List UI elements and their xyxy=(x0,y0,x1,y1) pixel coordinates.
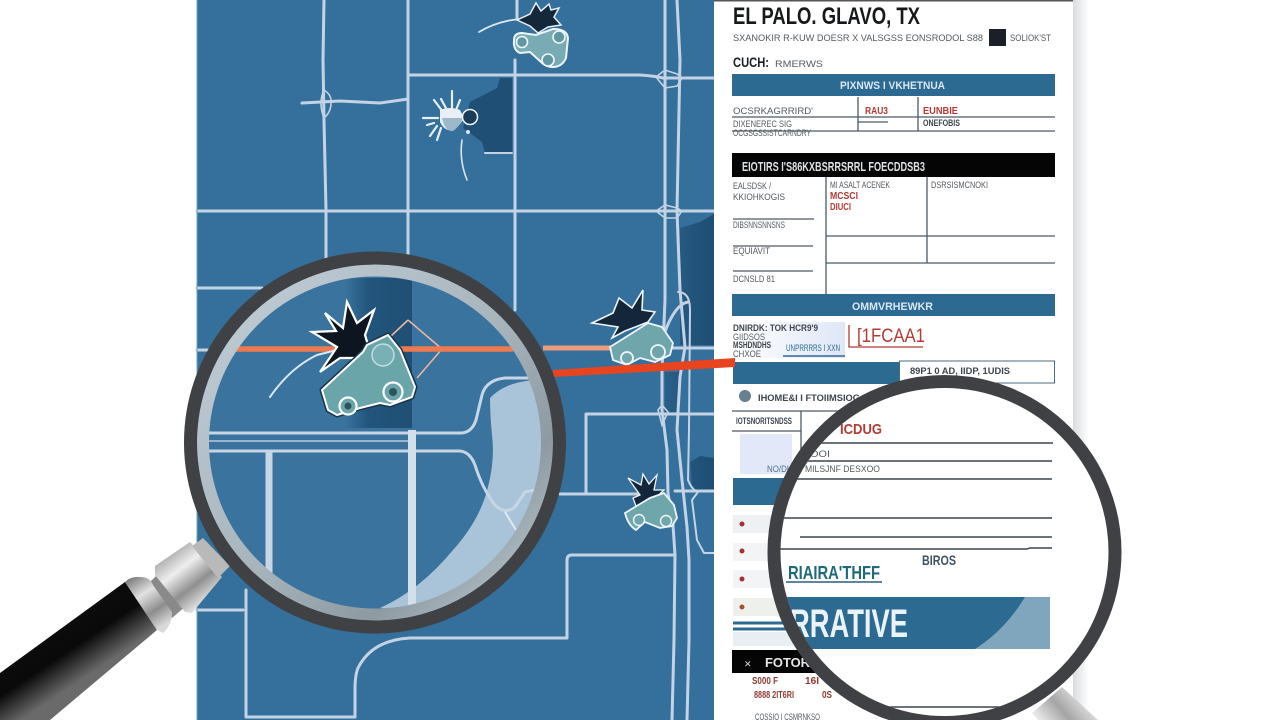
zoomed roads xyxy=(200,378,535,610)
dark waterfront patches xyxy=(665,214,714,490)
text block: overview xyxy=(732,322,845,359)
zoomed map content xyxy=(209,278,541,608)
section header: black footer band xyxy=(732,650,822,673)
icon: crash burst xyxy=(312,302,374,372)
case label xyxy=(733,54,823,70)
section header: black band: EIOTIRS I'S86KXBSRRSRRL FOECDDSB3 xyxy=(742,159,925,174)
list: red bullet rows xyxy=(733,515,793,646)
table: crash summary: DIXENEREC SIG xyxy=(733,119,792,129)
table: information rows: IOTSNORITSNDSS xyxy=(736,416,792,426)
lens inner edge xyxy=(778,386,1110,718)
zoomed field label: ICDUG xyxy=(840,421,882,438)
arrow: red connector from map to report xyxy=(553,358,735,377)
zoomed report content xyxy=(770,421,1053,707)
text block: footer codes: 16I xyxy=(805,676,819,687)
text block: footer codes: 0S xyxy=(822,690,832,701)
text block: footer codes: S000 F xyxy=(752,676,778,687)
lens outer rim xyxy=(190,258,560,627)
icon: crash marker lower xyxy=(625,474,677,530)
table: unit details: DIUCI xyxy=(830,202,851,213)
table: unit details: MCSCI xyxy=(830,191,858,202)
zoomed bottom rule xyxy=(880,706,1000,708)
zoomed small fields xyxy=(806,450,880,472)
table: unit details: EQUIAVIT xyxy=(733,246,770,256)
dark district patch xyxy=(463,78,512,153)
icon: crashed car xyxy=(322,335,415,415)
table: unit details: MI ASALT ACENEK xyxy=(830,180,890,190)
table: crash summary: EUNBIE xyxy=(923,106,958,117)
swoosh line xyxy=(270,350,337,397)
heading: home information xyxy=(739,390,860,403)
zoomed narrative banner xyxy=(770,597,1050,649)
heading: home information: IHOME&I I FTOIIMSIOG xyxy=(758,393,860,403)
table: information rows xyxy=(732,411,1050,474)
icon: right magnifying glass handle xyxy=(1032,687,1098,720)
section header: blue band 3 xyxy=(733,478,803,505)
report subtitle line: SOLIOK'ST xyxy=(1010,33,1051,43)
zoomed small fields: MILSJNF DESXOO xyxy=(805,464,880,474)
zoomed small fields: OOI xyxy=(810,449,830,459)
zoomed bold label: BIROS xyxy=(922,552,956,568)
panel: city street map xyxy=(197,0,714,720)
table: unit details: EALSDSK / xyxy=(733,181,771,191)
text block: footer codes: 8888 2IT6RI xyxy=(754,690,794,701)
highlighted crash intersection xyxy=(236,319,513,378)
pale water area xyxy=(380,380,541,608)
table: unit details: DCNSLD 81 xyxy=(733,274,775,284)
zoomed subheading: RIAIRA'THFF xyxy=(788,563,880,583)
text block: overview: MSHDNDHS xyxy=(733,340,771,350)
table: crash summary: ONEFOBIS xyxy=(923,118,960,128)
dark patch xyxy=(345,278,412,428)
case label: CUCH: xyxy=(733,54,769,70)
road network xyxy=(197,0,714,720)
panel: left magnifying lens xyxy=(190,258,560,627)
section header: blue band 1 xyxy=(732,74,1055,96)
table: unit details: DSRSISMCNOKI xyxy=(931,180,988,190)
report subtitle line: SXANOKIR R-KUW DOESR X VALSGSS EONSRODOL S88 xyxy=(733,33,983,43)
table: unit details: DIBSNNSNNSNS xyxy=(733,220,785,230)
panel: right magnifying lens xyxy=(770,382,1115,720)
text block: overview: UNPRRRRS I XXN xyxy=(786,343,840,353)
report subtitle line xyxy=(733,29,1051,46)
text block: overview: CHXOE xyxy=(733,349,761,359)
zoomed narrative banner: RRATIVE xyxy=(790,602,908,646)
table: crash summary: RAU3 xyxy=(865,106,888,117)
icon: crash marker top xyxy=(479,3,568,67)
lens outer rim xyxy=(774,382,1115,720)
table: crash summary xyxy=(732,97,1055,138)
lens inner bezel xyxy=(203,270,547,614)
section header: blue band 1: PIXNWS I VKHETNUA xyxy=(840,80,945,92)
section header: blue band with white box xyxy=(733,361,1054,384)
table: information rows: NO/DI xyxy=(767,464,789,474)
callout: red citation stamp: [1FCAA1 xyxy=(857,326,925,347)
section header: black band xyxy=(732,153,1055,177)
table: crash summary: OCGSGSSISTCARNDRY xyxy=(733,128,811,138)
panel: crash report document xyxy=(714,0,1089,720)
section header: blue band with white box: 89P1 0 AD, IIDP, 1UDIS xyxy=(910,366,1010,376)
zoomed rule lines xyxy=(780,443,1053,549)
icon: crash marker right xyxy=(592,290,673,365)
case label: RMERWS xyxy=(775,59,823,69)
section header: black footer band: FOTOR xyxy=(765,655,811,670)
table: unit details: KKIOHKOGIS xyxy=(733,192,785,202)
text block: overview: DNIRDK: TOK HCR9'9 xyxy=(733,323,818,333)
text block: footer codes xyxy=(752,676,832,720)
section header: blue band 2: OMMVRHEWKR xyxy=(852,301,933,313)
section header: black footer band: ✕ xyxy=(744,659,752,669)
table: unit details xyxy=(733,177,1055,295)
section header: blue band 2 xyxy=(732,294,1055,316)
table: crash summary: OCSRKAGRRIRD' xyxy=(733,106,813,116)
icon: crash marker white splash xyxy=(423,91,478,180)
document title: EL PALO. GLAVO, TX xyxy=(733,3,920,30)
text block: overview: GIIDSOS xyxy=(733,332,765,342)
icon: left magnifying glass handle xyxy=(0,538,230,720)
